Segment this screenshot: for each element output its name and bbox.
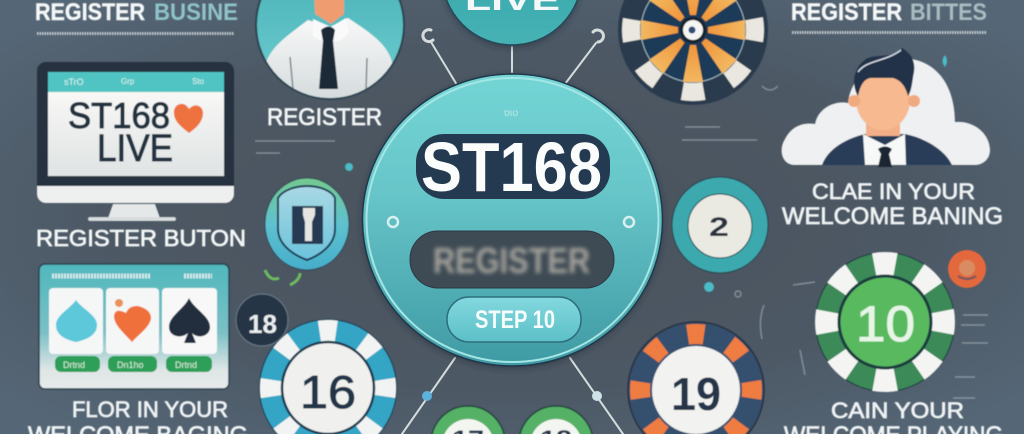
- chip 16: 16: [300, 366, 356, 418]
- bottom green badges: [431, 406, 593, 434]
- card: black spade: [162, 288, 217, 354]
- person avatar circle: [255, 0, 405, 100]
- bottom left caption: FLOR IN YOUR: [72, 397, 228, 422]
- right middle caption: CLAE IN YOUR: [812, 179, 975, 204]
- panel: playing cards: [39, 264, 229, 389]
- connector lines: [402, 30, 623, 434]
- card buttons: Drtnd: [175, 360, 197, 370]
- bottom right caption: CAIN YOUR: [831, 398, 964, 423]
- ST168 title pill: ST168: [421, 128, 602, 206]
- top right heading: [791, 0, 987, 32]
- dart wedges: [641, 0, 745, 82]
- register button label: REGISTER BUTON: [36, 225, 246, 251]
- blurred register pill: REGISTER: [433, 240, 590, 281]
- 18 badge: [236, 294, 288, 346]
- monitor icon: Sto: [192, 77, 205, 86]
- monitor icon: [37, 62, 234, 221]
- chip 19: [628, 322, 764, 434]
- chip 16: [259, 319, 397, 434]
- bottom right caption: [784, 398, 1003, 434]
- bottom left caption: [28, 397, 248, 434]
- 18 badge: 18: [248, 309, 277, 339]
- lock badge: [265, 178, 349, 270]
- blurred register pill: [410, 231, 614, 288]
- card buttons: [55, 356, 212, 372]
- monitor icon: sTrO: [64, 77, 84, 87]
- card buttons: Dn1ho: [117, 360, 144, 370]
- monitor icon: ST168: [68, 95, 170, 136]
- central circle: [362, 74, 662, 366]
- top left heading: [35, 0, 238, 34]
- live circle: [442, 0, 582, 45]
- card: teal spade: [49, 288, 103, 354]
- monitor icon: Grp: [121, 77, 135, 86]
- monitor icon: LIVE: [97, 128, 173, 170]
- right middle caption: [782, 179, 1003, 230]
- step button: [447, 297, 581, 342]
- person on cloud: [782, 48, 990, 167]
- green chip 10: 10: [856, 296, 915, 352]
- card buttons: Drtnd: [63, 360, 85, 370]
- step button: STEP 10: [475, 306, 555, 334]
- small teal accents: [265, 55, 947, 292]
- card: orange heart: [106, 288, 159, 354]
- orange badge: [948, 250, 986, 288]
- central circle: טוס: [504, 108, 518, 118]
- register label: REGISTER: [267, 104, 382, 131]
- green chip 10: [815, 252, 955, 392]
- right middle caption: WELCOME BANING: [782, 203, 1003, 230]
- small number badge: 2: [709, 212, 729, 242]
- small number badge: [672, 177, 768, 273]
- dartboard: [618, 0, 768, 105]
- faint decorative marks: [255, 86, 988, 398]
- heart: [174, 104, 203, 133]
- chip 19: 19: [671, 368, 721, 420]
